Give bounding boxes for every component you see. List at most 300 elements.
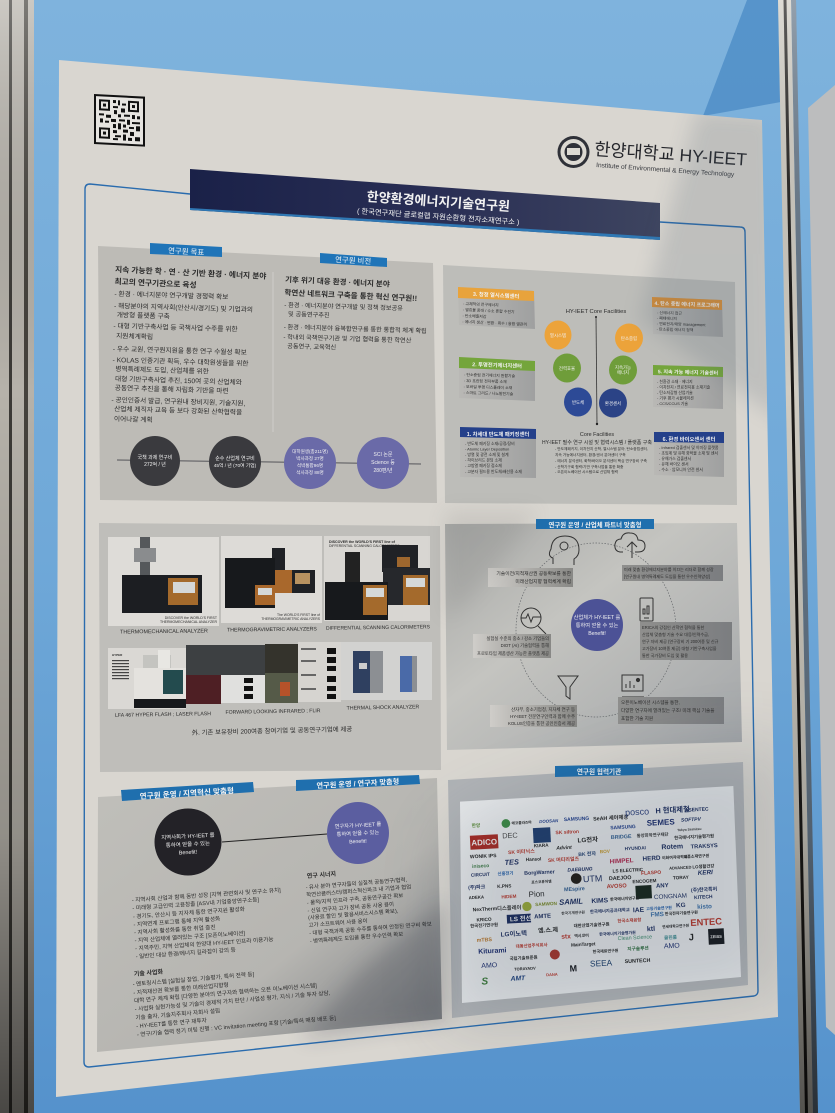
caption: laser flash: LFA 467 HYPER FLASH ; LASER FLASH [115, 711, 211, 719]
logo wall: stx [561, 933, 571, 941]
logo wall: BorgWarner [524, 869, 555, 877]
callout: technology transfer: 미래산업지향 협력체계 확립 [515, 578, 571, 585]
box 4: carbon neutral energy management centre [652, 297, 723, 337]
logo wall: Hansol [526, 856, 541, 862]
tab: partners: 연구원 협력기관 [577, 767, 621, 776]
box 6: environmental bio sensor centre: - 초임계 및 유해 화학물 소재 및 센서 [659, 450, 718, 456]
text block: technology commercialization: 기술 사업화 [133, 968, 164, 978]
logo wall: KIMS [591, 897, 609, 905]
text block: technology commercialization: 기술 출자, 기술지주회사 자회사 설립 [135, 1006, 220, 1022]
tab: goals [150, 243, 222, 257]
logo wall: K.PNS [497, 883, 512, 889]
tab: industry partner [536, 519, 654, 529]
facility circle: semiconductor [564, 388, 592, 416]
logo wall: SAMSUNG [610, 824, 636, 831]
stat circle: graduate students: 석사과정 88명 [296, 469, 324, 476]
box 1: next-gen semiconductor packaging centre: - 방열 및 광전 소재 및 설계 [465, 452, 509, 457]
icon: funnel [558, 676, 578, 699]
stat circle: industry funding: 45억 / 년 (70여 기업) [214, 462, 257, 469]
box 6: environmental bio sensor centre: 6. 환경 바이오센서 센터 [663, 435, 715, 443]
stat circle: graduate students: 대학원생(총211명) [292, 448, 328, 455]
tab: industry partner: 연구원 운영 / 산업체 파트너 맞춤형 [549, 520, 642, 529]
facility circle: environmental sensor [599, 388, 627, 418]
circle: researcher benefit: 연구자가 HY-IEET 를 [334, 820, 382, 830]
circle: regional benefit [154, 808, 222, 876]
text block: core facilities description: HY-IEET 필수 연구 시설 및 협력시스템 / 플랫폼 구축 [542, 439, 652, 446]
logo wall: DAEBUNG [567, 866, 593, 874]
row 8: NexTherm [473, 906, 498, 913]
text block: goals: - 환경 · 에너지분야 연구개발 경쟁력 확보 [114, 289, 229, 301]
logo wall: ADVANCED [669, 865, 692, 871]
logo wall: Pion [528, 889, 545, 899]
logo wall: Rotem [661, 843, 683, 851]
box 5: sustainable energy centre: - 친환경 소재 · 에너지 [657, 379, 693, 384]
circle: regional benefit: 지역사회가 HY-IEET 를 [161, 831, 215, 841]
logo wall: DANA [546, 972, 558, 977]
logo wall: BK 전자 [578, 850, 597, 858]
panel: partner institutions [448, 762, 748, 1018]
text block: vision: 기후 위기 대응 환경 · 에너지 분야 [285, 274, 390, 289]
logo wall [460, 786, 741, 1003]
logo wall: SK 이터닉스 [508, 848, 535, 856]
stat circle: SCI papers: Science 등 [371, 460, 395, 466]
logo wall: TRAKSYS [691, 843, 718, 851]
logo wall: HYUNDAI [625, 845, 646, 851]
text block: core facilities description: - 반도체패키지, 이차전지 산학, 열시스템 분야, 탄소중립센터, [555, 446, 648, 451]
logo wall: M [569, 963, 577, 974]
text block: technology commercialization: - 연구/기술 협력 정기 미팅 진행 : VC invitation meeting 포함 [기술/특허 매칭 배포 등] [137, 1014, 336, 1038]
label: core facilities diagram title: HY-IEET Core Facilities [566, 309, 626, 315]
stat circle: industry funding [209, 436, 261, 488]
facility circle: environmental sensor: 환경센서 [605, 400, 621, 407]
text block: research synergy: - 신임 연구자 고가 장비 공동 사용 용이 [307, 900, 394, 915]
box 5: sustainable energy centre: 5. 지속 가능 에너지 기술센터 [658, 368, 719, 377]
facility circle: carbon neutral [615, 324, 643, 352]
text block: goals: - 공인인증서 발급, 연구원내 장비지원, 기술지원, [111, 395, 246, 408]
callout: ERICA collaboration: 고가장비 10여종 제공) 대형 기반구축사업을 [642, 645, 717, 651]
logo wall: AMTE [534, 914, 551, 920]
text block: technology commercialization: 대학 연구 체계 확립 [다양한 분야의 연구자와 협력하는 오픈 이노베이션 시스템] [134, 981, 318, 1005]
logo wall: SEEA [590, 957, 613, 969]
facilities axis [595, 316, 598, 425]
logo wall: FMS [650, 911, 664, 919]
logo wall: ASENTEC [685, 807, 709, 814]
text block: goals: - 우수 교원, 연구원지원을 통한 연구 수월성 확보 [113, 344, 247, 357]
box 6: environmental bio sensor centre: - Infrared 검출센서 및 이미징 플랫폼 [659, 445, 719, 450]
stat circle: industry funding: 순수 산업체 연구비 [215, 455, 255, 462]
row 13: TORAYADV [514, 965, 536, 972]
logo wall: SK siltron [555, 829, 579, 836]
facility circle: power efficiency: 전력효율 [559, 365, 575, 372]
logo wall: 포스코퓨처엠 [531, 879, 552, 885]
text block: research synergy: 연구 시너지 [307, 870, 336, 880]
stat circle: SCI papers: SCI 논문 [374, 452, 393, 458]
institute name: Institute of Environmental & Energy Technology [596, 162, 735, 179]
wall shadow at upper right [703, 0, 792, 116]
callout: KOLUS certification: HY-IEET 전문연구인력과 함께 수주 [510, 713, 575, 720]
logo wall: SOFTPV [681, 817, 702, 824]
text block: research synergy: - 병역특례제도 도입을 통한 우수인력 확보 [310, 930, 404, 945]
logo wall: AVOSO [607, 883, 627, 890]
logo wall: 한국에너지공과대학교 [590, 906, 630, 915]
logo wall: 한국소재융합 [617, 916, 642, 924]
text block: goals: 이어나갈 계획 [114, 414, 153, 424]
instrument image: thermal shock chambers [341, 642, 432, 700]
box 3: carbon neutral hydrogen centre: - 고체적의 전구에너지 [463, 301, 499, 308]
box 6: environmental bio sensor centre: - 유해 바이오 센서 [659, 462, 689, 466]
box 2: future energy centre: - 스마트 그리드 / 나노발전기술 [464, 390, 514, 396]
text block: regional benefits: - 지역주민, 지역 산업체의 한양대 HY-IEET 인프라 이용가능 [135, 935, 274, 952]
text block: goals: 개방형 플랫폼 구축 [117, 310, 170, 321]
callout: talent recruitment: 미래 맞춤 환경에너지분야를 이끄는 리더로 함께 성장 [624, 566, 714, 572]
icon: head with gear [549, 536, 579, 565]
instrument image: thermogravimetric analyzers [221, 536, 322, 623]
box 3: carbon neutral hydrogen centre: - 열효율 증대 / 수소 혼합 수전기 [463, 307, 515, 314]
text block: goals: 지원체계확립 [116, 331, 153, 341]
centre circle: 산업체가 HY-IEET 를 [574, 613, 621, 621]
callout: technology transfer: 기술이전/지적재산권 공동확보를 통한 [496, 570, 572, 577]
callout: open innovation: 포함한 기술 지원 [621, 715, 653, 722]
callout: technology transfer [488, 568, 573, 587]
text block: regional benefits: - 미래형 고급인력 고용창출 [ASV내 기업중앙연구소등] [132, 895, 260, 912]
row 1: 한양 [471, 822, 481, 828]
logo wall: ZEISS [710, 934, 722, 939]
box 2: future energy centre: - 탄소중립 전기에너지 원활기술 [464, 372, 516, 378]
logo wall: 한국기계연구원 [561, 909, 586, 916]
text block: research synergy: - 물적/지적 인프라 구축, 공동연구공간 확보 [307, 891, 404, 907]
box 4: carbon neutral energy management centre: - 탄소중립 에너지 정책 [657, 326, 694, 332]
logo wall: Clean Science [618, 934, 652, 942]
text block: vision [282, 274, 429, 356]
logo wall: Advint [555, 845, 572, 852]
box 1: next-gen semiconductor packaging centre [460, 427, 536, 478]
logo wall: Tokyo Seimitsu [677, 827, 702, 832]
logo wall: MEspire [564, 886, 585, 893]
text block: research synergy: 고가 소프트웨어 사용 용이 [308, 916, 368, 929]
callout: KOLUS certification: KOLUS인증을 통한 공인인증서 제공 [508, 720, 575, 727]
callout: ERICA collaboration: ERICA의 강점인 산학연 협력을 통한 [642, 624, 704, 630]
facility circle: sustainable energy [609, 356, 637, 384]
logo wall: AMO [664, 943, 681, 950]
logotype: 한양대학교 HY-IEET [594, 139, 748, 170]
facility circle: thermal systems: 열시스템 [550, 332, 566, 338]
caption: thermal shock analyzer: THERMAL SHOCK ANALYZER [347, 704, 420, 712]
logo wall: AMT [510, 975, 526, 983]
logo wall: 동양화학연구재단 [637, 831, 669, 839]
note: equipment provision: 外. 기존 보유장비 200여종 참여기업 및 공동연구기업에 제공 [192, 724, 352, 737]
instrument image: thermogravimetric analyzers: The WORLD'S FIRST line of [277, 613, 320, 617]
logo wall: 대한산업기술연구원 [574, 921, 610, 929]
callout: open innovation [618, 697, 724, 724]
text block: vision: - 학내외 국책연구기관 및 기업 협력을 통한 학연산 [283, 333, 412, 345]
box 3: carbon neutral hydrogen centre: - 탄소배출저감 [462, 313, 487, 319]
circle: researcher benefit: 통하여 얻을 수 있는 [336, 828, 380, 838]
lighting shadows on the poster [300, 110, 790, 1040]
row 2 [470, 834, 499, 850]
text block: vision: - 환경 · 에너지분야 연구개발 및 정책 정보공유 [284, 301, 403, 312]
logo wall: BOV [600, 849, 611, 854]
text block: goals: 지속 가능한 학 · 연 · 산 기반 환경 · 에너지 분야 [115, 264, 267, 281]
logo wall: ENTEC [690, 916, 722, 928]
logo wall: TES [504, 857, 519, 867]
logo wall: HIMPEL [610, 857, 634, 865]
caption: differential scanning calorimeters: DIFFERENTIAL SCANNING CALORIMETERS [326, 624, 431, 632]
logo wall: 제품소재연구원 [683, 852, 710, 859]
logo wall: ANY [656, 883, 669, 890]
box 5: sustainable energy centre [653, 365, 723, 409]
text block: vision: 공동연구, 교육혁신 [287, 342, 337, 351]
logo wall: 엠.스.제 [538, 926, 558, 935]
box 3: carbon neutral hydrogen centre [458, 287, 535, 329]
right rail of display frame [778, 0, 818, 1113]
logo wall: 지구솔루션 [627, 945, 649, 953]
box 5: sustainable energy centre: - CCS/CCUS 기술 [657, 401, 688, 406]
stat circle: national research funding: 국책 과제 연구비 [138, 454, 172, 461]
text block: goals: 대형 기반구축사업 추진, 150여 곳의 산업체와 [115, 374, 242, 387]
text block: vision: 및 공동연구추진 [288, 310, 330, 319]
logo wall: LG생활건강 [692, 862, 715, 870]
text block: regional benefits: - 경기도, 안산시 등 지자체 통한 연구지원 활성화 [133, 905, 245, 920]
logo wall: KITECH [694, 894, 713, 901]
logo wall: FLASPO [641, 870, 662, 877]
text block: core facilities description: - 오픈이노베이션 시스템으로 산업체 협력 [555, 469, 618, 474]
facility circle: carbon neutral: 탄소중립 [621, 335, 637, 341]
text block: goals: 산업체 제직자 교육 등 보다 강화된 산학협력을 [114, 404, 242, 417]
stat circle: graduate students: 석박통합96명 [297, 462, 323, 469]
tab: vision [320, 253, 387, 267]
facility circle: sustainable energy: 에너지 [617, 369, 629, 376]
text block: core facilities description: Core Facilities [580, 432, 614, 438]
instrument image: laser flash: HYPER [112, 653, 123, 657]
logo wall: J [689, 932, 694, 942]
logo wall: KG [676, 902, 686, 909]
box 1: next-gen semiconductor packaging centre: - 반도체 패키징 소재/공정/장비 [465, 441, 515, 446]
stat circle: graduate students: 박사과정 27명 [296, 455, 324, 462]
text block: goals: - 대형 기반구축사업 등 국책사업 수주를 위한 [113, 321, 238, 333]
text block: core facilities description [542, 432, 652, 474]
callout: ERICA collaboration: 통한 국가장비 도입 및 활용 [642, 652, 688, 658]
text block: goals: 최고의 연구기관으로 육성 [114, 276, 197, 290]
circle: researcher benefit [327, 802, 389, 864]
logo wall: KERI [698, 869, 713, 877]
facility circle: sustainable energy: 지속가능 [615, 364, 631, 371]
tab: goals: 연구원 목표 [168, 246, 205, 257]
text block: goals: 병역특례제도 도입, 산업체를 위한 [115, 364, 209, 376]
logo wall: 고등기술연구원 [646, 904, 672, 911]
text block: research synergy [305, 863, 433, 945]
logo wall: 디스플레이 [497, 903, 522, 912]
logo wall: DEC [502, 831, 519, 840]
logo wall: SAMIL [559, 897, 583, 907]
box 2: future energy centre [459, 357, 535, 401]
logo wall: LS 전선 [510, 913, 532, 923]
instrument image: infrared product sheet [298, 642, 341, 702]
logo wall: 한국에너지기술평가원 [674, 832, 714, 841]
instrument image: thermomechanical analyzer: THERMOMECHANICAL ANALYZER [160, 620, 217, 624]
panel: core facilities [443, 265, 737, 505]
subtitle: ( 한국연구재단 글로컬랩 자원순환형 전자소재연구소 ) [357, 206, 520, 227]
box 4: carbon neutral energy management centre: - 연료전지/태양 management [657, 321, 706, 327]
instrument image: thermomechanical analyzer: DISCOVER the WORLD'S FIRST [165, 616, 218, 620]
row 9: KRICO [476, 917, 492, 923]
icon: presentation [622, 675, 644, 697]
box 1: next-gen semiconductor packaging centre: - 고분자 필드용 반도체/배선용 소재 [465, 469, 522, 474]
icon: phone with chart [640, 598, 653, 621]
text block: technology commercialization [132, 953, 336, 1038]
box 2: future energy centre: - 모바일 투명 디스플레이 소재 [464, 384, 513, 390]
text block: vision: - 환경 · 에너지분야 융복합연구를 통한 통합적 체계 확립 [284, 323, 427, 335]
box 3: carbon neutral hydrogen centre: 3. 청정 열시스템센터 [473, 290, 520, 300]
box 4: carbon neutral energy management centre: - 폐태에너지 [657, 315, 678, 321]
row 14: S [481, 976, 489, 988]
QR code [94, 94, 145, 147]
callout: ERICA collaboration [640, 622, 732, 660]
box 5: sustainable energy centre: - 이차전지 / 연료전지용 소재기술 [657, 384, 711, 390]
centre circle: Benefit! [588, 631, 606, 637]
instrument image: differential scanning calorimeters: DIFFERENTIAL SCANNING CALORIMETERS [329, 544, 400, 548]
logo wall: CONGNAM [654, 892, 687, 901]
outer blue frame [84, 184, 758, 1067]
box 6: environmental bio sensor centre: - 수소 · 암모니아 안전 센서 [659, 467, 703, 472]
callout: talent recruitment: [연구원내 병역특례제도 도입을 통한 우수인력양성] [624, 573, 710, 579]
stat circle: national research funding [130, 436, 180, 486]
logo wall: HERD [642, 855, 661, 863]
logo wall: 한국전자기술연구원 [665, 909, 698, 916]
text block: technology commercialization: - 멘토링시스템 [실험실 창업, 기술평가, 특허 전략 등] [132, 970, 255, 988]
box 4: carbon neutral energy management centre: - 신에너지 접근 [657, 310, 682, 316]
text block: goals: - 해당분야의 지역사회(안산시/경기도) 및 기업과의 [114, 301, 253, 314]
university seal [558, 136, 590, 168]
text block: core facilities description: 지속 가능에너지센터, 환경/센서 분야센터 구축 [555, 452, 626, 457]
icon: magnifier with pulse [521, 608, 546, 634]
caption: thermogravimetric analyzers: THERMOGRAVIMETRIC ANALYZERS [227, 626, 317, 634]
logo wall: (주)한국특허 [691, 886, 718, 894]
instrument image: differential scanning calorimeters: DISCOVER the WORLD'S FIRST line of [329, 540, 396, 544]
logo wall: 이화여자대학교 [662, 853, 688, 860]
logo wall: ADICO [471, 837, 497, 848]
box 1: next-gen semiconductor packaging centre: - 고방열 패키징 접소재 [465, 463, 502, 468]
box 2: future energy centre: - 3D 프린팅 전자부품 소재 [464, 378, 507, 384]
circle: regional benefit: Benefit! [179, 850, 198, 856]
tab: vision: 연구원 비전 [335, 255, 372, 266]
tab: researcher: 연구원 운영 / 연구자 맞춤형 [316, 777, 399, 790]
callout: lab level: DIOT (AI) 기술협력을 통해 [501, 642, 549, 649]
row 4: iniseco [472, 863, 489, 870]
tab: partners [555, 764, 643, 777]
logo wall: IAE [633, 907, 645, 914]
text block: regional benefits [132, 886, 285, 960]
caption: thermomechanical analyzer: THERMOMECHANICAL ANALYZER [120, 628, 208, 636]
row 5: CIRCUIT [471, 872, 490, 878]
text block: technology commercialization: - 지적재산권 확보를 통한 미래산업지향형 [133, 981, 229, 997]
logo wall: 엑시코어 [574, 932, 589, 938]
text block: regional benefits: - 일반인 대상 환경/에너지 길라잡이 강의 등 [135, 946, 236, 960]
text block: core facilities description: - 에너지 분석센터, 화학/바이오 분석센터 핵심 연구장비 구축 [555, 458, 647, 463]
main title: 한양환경에너지기술연구원 [366, 189, 510, 214]
box 1: next-gen semiconductor packaging centre: - 하이브리드 본딩 소재 [465, 458, 502, 462]
logo wall: DAEJOO [609, 875, 632, 882]
logo wall: H 현대제철 [655, 805, 690, 815]
text block: core facilities description: - 산학기구회 협력/기반 구축사업을 통한 확충 [555, 464, 624, 469]
circle: researcher benefit: Benefit! [349, 839, 367, 845]
callout: ERICA collaboration: 산업체 맞춤형 기술 수요 대응/인력수급, [642, 631, 709, 637]
row 11: Kiturami [478, 947, 507, 956]
facility circle: thermal systems [544, 320, 572, 350]
box 2: future energy centre: 2. 투명전기에너지센터 [472, 360, 522, 370]
text block: technology commercialization: - 사업화 실현가능성 및 기술의 경제적 가치 판단 / 사업성 평가, 지식 / 기술 투자 상담, [134, 989, 331, 1013]
text block: regional benefits: - 지역사회 활성화를 통한 취업 증진 [134, 923, 216, 936]
box 3: carbon neutral hydrogen centre: - 에너지 생산 · 변환 · 회수 / 융합 열관리 [462, 319, 528, 327]
box 1: next-gen semiconductor packaging centre: - Atomic Layer Deposition [465, 446, 509, 452]
text block: regional benefits: - 지역연계 프로그램 통해 지역 활성화 [133, 915, 220, 928]
logo wall: KIARA [534, 843, 549, 848]
logo wall: 한국에너지연구원 [610, 894, 640, 902]
box 5: sustainable energy centre: - 기후 평가 시뮬레이션 [657, 396, 694, 400]
icon: cloud upload [615, 533, 645, 558]
logo wall: 신흥전기 [497, 870, 514, 877]
logo wall: LG이노텍 [500, 928, 527, 939]
logo wall: 연세대학교연구원 [662, 923, 690, 929]
logo wall: BRIDGE [611, 834, 632, 841]
box 4: carbon neutral energy management centre: 4. 탄소 중립 에너지 프로그래머 [654, 300, 720, 309]
title bar [190, 169, 660, 240]
circle: regional benefit: 통하여 얻을 수 있는 [166, 839, 210, 849]
text block: research synergy: (사용료 할인 및 활용서비스시스템 확보), [308, 907, 399, 922]
text block: research synergy: - 대형 국책과제 공동 수주를 통하여 안정된 연구비 확보 [309, 920, 432, 937]
caption: FLIR: FORWARD LOOKING INFRARED ; FLIR [225, 708, 321, 716]
logo wall: LS ELECTRIC [612, 867, 644, 874]
instrument image: laser flash [108, 648, 186, 709]
logo wall: SAMWON [535, 901, 558, 907]
text block: regional benefits: - 지역 산업체에 열려있는 구조 [오픈이노베이션] [134, 929, 246, 944]
logo wall: 국립기술표준원 [509, 954, 538, 962]
row 6: (주)파크 [468, 883, 486, 891]
logo wall: posco [625, 806, 649, 818]
logo wall: 대동산업주식회사 [515, 941, 548, 950]
callout: lab level: 실험실 수준의 중소 / 강소 기업들의 [486, 635, 549, 642]
stat circle: national research funding: 272억 / 년 [144, 461, 166, 468]
callout: KOLUS certification: 산자부, 중소기업청, 지자체 연구 등 [511, 706, 575, 713]
logo wall: 한국에너지기술평가원 [599, 929, 636, 937]
panel: instruments [99, 523, 441, 772]
logo wall: 한국전기연구원 [470, 921, 498, 930]
logo wall: ktl [647, 926, 655, 933]
logo wall: 에코플라즈마 [511, 819, 532, 826]
callout: talent recruitment [622, 565, 723, 581]
logo wall: ENCOGEM [632, 878, 657, 884]
instrument image: differential scanning calorimeters [324, 536, 430, 621]
logo wall: SeAH 세아제강 [593, 813, 629, 823]
text block: technology commercialization: - HY-IEET를 통한 연구 재투자 [136, 1016, 207, 1030]
box 6: environmental bio sensor centre: - 유해가스 검출센서 [659, 456, 692, 461]
logo wall: SAMSUNG [564, 816, 590, 823]
panel: goals and vision [98, 243, 437, 503]
logo wall: 클린룸 [664, 934, 678, 941]
logo wall: SUNTECH [624, 958, 651, 965]
text block: research synergy: 학연산클러스터/캠퍼스혁신파크 내 기업과 협업 [306, 883, 411, 899]
box 1: next-gen semiconductor packaging centre: 1. 차세대 반도체 패키징센터 [467, 430, 529, 438]
row 12: AMO [481, 962, 498, 970]
facility circle: power efficiency [553, 354, 581, 382]
row 10: mTBS [477, 937, 493, 944]
row 7: ADEKA [469, 894, 485, 900]
logo: Hanyang University HY-IEET [558, 136, 748, 179]
callout: open innovation: 다양한 연구자에 열려있는 구조/ 미래 핵심 기술을 [621, 707, 714, 714]
box 6: environmental bio sensor centre [654, 432, 724, 477]
instrument image: thermogravimetric analyzers: THERMOGRAVIMETRIC ANALYZERS [261, 617, 321, 621]
callout: KOLUS certification [490, 705, 577, 727]
logo wall: SK 머티리얼즈 [548, 855, 580, 864]
